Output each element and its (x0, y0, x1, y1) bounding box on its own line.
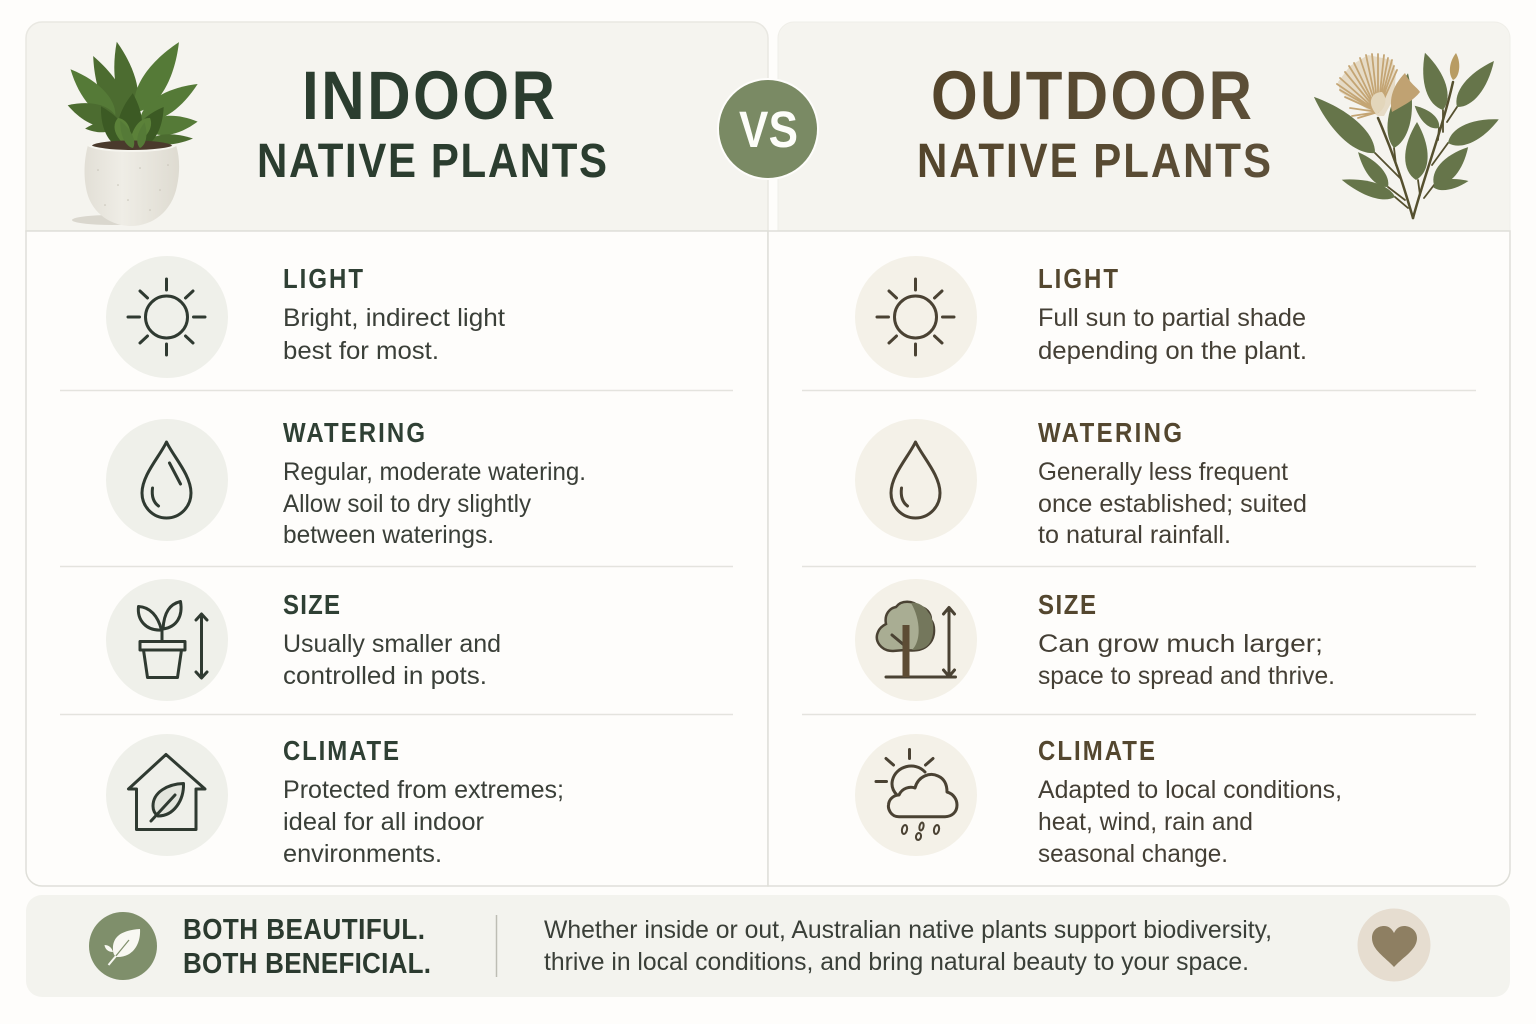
text: climate: CLIMATE (1038, 737, 1155, 766)
outdoor header background (778, 22, 1510, 231)
text: climate: ideal for all indoor (283, 808, 484, 836)
text: climate: heat, wind, rain and (1038, 808, 1253, 836)
text: light (1038, 265, 1307, 365)
text: light: best for most. (283, 337, 439, 365)
text: watering (1038, 419, 1307, 549)
text: size (283, 591, 501, 690)
text: size: Usually smaller and (283, 630, 501, 658)
text: size: space to spread and thrive. (1038, 662, 1335, 690)
divider lines (60, 390, 733, 714)
text: watering: WATERING (283, 419, 425, 448)
text: climate: environments. (283, 840, 442, 868)
panel: indoor native plants (26, 22, 768, 886)
row: climate (855, 734, 1342, 868)
heading: native plants: NATIVE PLANTS (917, 133, 1271, 188)
text: climate: Protected from extremes; (283, 776, 564, 804)
icon: house with leaf (106, 734, 228, 856)
indoor table body (26, 231, 768, 886)
vs badge (717, 78, 819, 180)
text: watering: to natural rainfall. (1038, 521, 1231, 549)
heading: native plants: NATIVE PLANTS (257, 133, 607, 188)
row: size (855, 579, 1335, 701)
text: size (1038, 591, 1335, 690)
icon: leaf badge (89, 912, 157, 980)
icon: water drop (106, 419, 228, 541)
text: light (283, 265, 505, 365)
summary text: Whether inside or out, Australian native plants support biodiversity, (544, 916, 1272, 944)
indoor header background (26, 22, 768, 231)
icon: water drop (855, 419, 977, 541)
bar background (26, 895, 1510, 997)
text: watering: Allow soil to dry slightly (283, 490, 531, 518)
text: watering (283, 419, 586, 549)
text: watering: once established; suited (1038, 490, 1307, 518)
row: watering (106, 419, 586, 549)
text: climate: Adapted to local conditions, (1038, 776, 1342, 804)
text: light: LIGHT (1038, 265, 1118, 294)
image: native flowering branch (1306, 50, 1503, 218)
icon: sun (855, 256, 977, 378)
text: watering: Generally less frequent (1038, 458, 1288, 486)
row: watering (855, 419, 1307, 549)
summary text (544, 916, 1272, 976)
vs badge: VS (739, 102, 798, 159)
text: light: LIGHT (283, 265, 363, 294)
text: climate (1038, 737, 1342, 868)
text: watering: between waterings. (283, 521, 494, 549)
text: light: Full sun to partial shade (1038, 304, 1306, 332)
headline: both beautiful, both beneficial: BOTH BEAUTIFUL. (183, 913, 425, 945)
text: climate: seasonal change. (1038, 840, 1228, 868)
row: light (106, 256, 505, 378)
text: climate: CLIMATE (283, 737, 399, 766)
text: watering: WATERING (1038, 419, 1182, 448)
panel: outdoor native plants (768, 22, 1510, 886)
divider (496, 915, 498, 977)
headline: both beautiful, both beneficial (183, 913, 431, 979)
text: light: Bright, indirect light (283, 304, 505, 332)
outdoor table body (768, 231, 1510, 886)
icon: potted seedling with height arrow (106, 579, 228, 701)
icon: sun (106, 256, 228, 378)
heading: indoor: INDOOR (302, 57, 555, 134)
text: size: SIZE (283, 591, 340, 620)
row: size (106, 579, 501, 701)
icon: sun, cloud and rain (855, 734, 977, 856)
text: climate (283, 737, 564, 868)
panel: bottom summary bar (26, 895, 1510, 997)
image: potted plant (63, 36, 203, 226)
text: size: SIZE (1038, 591, 1096, 620)
text: watering: Regular, moderate watering. (283, 458, 586, 486)
row: light (855, 256, 1307, 378)
row: climate (106, 734, 564, 868)
text: light: depending on the plant. (1038, 337, 1307, 365)
icon: tree with height arrow (855, 579, 977, 701)
headline: both beautiful, both beneficial: BOTH BENEFICIAL. (183, 947, 431, 979)
icon: heart badge (1358, 908, 1430, 982)
summary text: thrive in local conditions, and bring natural beauty to your space. (544, 948, 1249, 976)
text: size: controlled in pots. (283, 662, 487, 690)
divider lines (802, 390, 1476, 714)
heading: outdoor: OUTDOOR (931, 57, 1252, 134)
text: size: Can grow much larger; (1038, 630, 1323, 658)
